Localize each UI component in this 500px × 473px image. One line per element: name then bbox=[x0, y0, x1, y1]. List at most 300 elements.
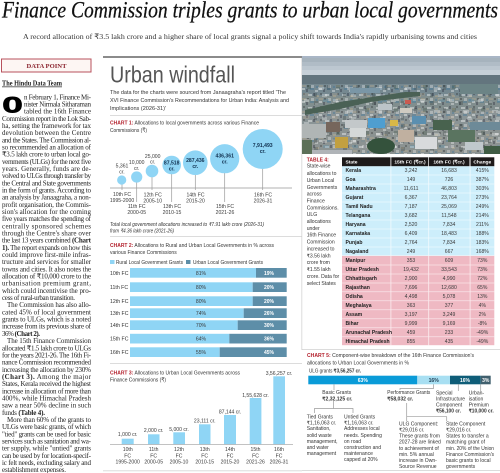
table 4 caption: Urban Local bbox=[307, 178, 334, 184]
table text: 211% bbox=[476, 222, 489, 228]
chart 2 values: 19% bbox=[264, 271, 275, 277]
table text: 25,069 bbox=[441, 204, 457, 210]
table text: Meghalaya bbox=[346, 303, 372, 309]
stacked bar bbox=[308, 376, 491, 384]
untied grants: construction and bbox=[344, 445, 381, 451]
chart 3 values bbox=[118, 371, 292, 438]
table text: 377 bbox=[445, 303, 453, 309]
photo: aerial view of city bbox=[302, 56, 500, 154]
tied grants: management, bbox=[307, 439, 338, 445]
untied grants: capped at 20% bbox=[344, 457, 378, 463]
urbanisation premium: Urban- bbox=[469, 390, 484, 396]
article text: the last 13 years combined (Chart bbox=[2, 237, 92, 245]
data point label bbox=[2, 59, 91, 72]
chart 2 bars bbox=[130, 268, 287, 357]
chart 2 values: 64% bbox=[196, 336, 207, 342]
table text: Manipur bbox=[346, 258, 365, 264]
chart 1 note: Total local government allocations increased to ₹7.91 lakh crore (2026-31) bbox=[110, 222, 264, 228]
basic grants bbox=[322, 390, 353, 402]
chart 5 heading: CHART 5: Component-wise breakdown of the 16th Finance Commission's bbox=[307, 353, 474, 359]
stacked bar: 16% bbox=[460, 378, 471, 384]
table text: Arunachal Pradesh bbox=[346, 330, 392, 336]
timeline labels bbox=[110, 192, 273, 216]
table text: 273% bbox=[476, 195, 489, 201]
chart 3 values: 87,144 cr. bbox=[219, 410, 241, 416]
table text: 73% bbox=[477, 267, 488, 273]
chart 1 heading bbox=[110, 120, 259, 134]
special infrastructure component: Component bbox=[436, 402, 463, 408]
tied grants: ₹1,16,063 cr. bbox=[307, 420, 336, 426]
table text: 33,543 bbox=[441, 267, 457, 273]
timeline labels: 11th FC bbox=[128, 204, 146, 210]
article text: 36% (Chart 2). bbox=[2, 330, 40, 338]
chart 3 axis labels: 2005-10 bbox=[170, 460, 189, 466]
performance grants bbox=[387, 390, 431, 402]
state component: min. 20% of the Union bbox=[446, 446, 494, 452]
state component: Finance Commission's bbox=[446, 452, 494, 458]
table text: 249 bbox=[407, 249, 415, 255]
table text: 73% bbox=[477, 258, 488, 264]
bubble values: 7,91,493 bbox=[253, 143, 273, 149]
timeline labels: 2010-15 bbox=[163, 210, 182, 216]
state component bbox=[446, 422, 494, 470]
article text: 1). The report expands on how this bbox=[2, 244, 91, 252]
table text: 3,249 bbox=[443, 312, 456, 318]
ULG component: min. 5% annual bbox=[399, 452, 434, 458]
table text: 13% bbox=[477, 294, 488, 300]
subtitle: A record allocation of ₹3.5 lakh crore and a higher share of local grants signal a policy shift towards India's rapidly urbanising towns and cities bbox=[23, 32, 477, 41]
table 4 caption: TABLE 4: bbox=[307, 157, 329, 163]
table text: 2% bbox=[479, 312, 486, 318]
table text: 2,900 bbox=[405, 276, 418, 282]
tied grants: solid waste bbox=[307, 433, 332, 439]
bubble values: cr. bbox=[169, 166, 175, 172]
article text bbox=[2, 93, 92, 473]
chart 2 values: 81% bbox=[196, 271, 207, 277]
urbanisation premium bbox=[469, 390, 494, 414]
table text: -49% bbox=[476, 339, 489, 345]
chart 2 heading: various Finance Commissions bbox=[110, 250, 177, 256]
table text: Haryana bbox=[346, 222, 366, 228]
table text: 7,834 bbox=[443, 222, 456, 228]
table text: 249% bbox=[476, 204, 489, 210]
timeline labels: 2026-31 bbox=[254, 198, 273, 204]
table text: 11,611 bbox=[404, 186, 419, 192]
bubble values: 25,000 bbox=[145, 154, 161, 160]
timeline labels: 13th FC bbox=[163, 204, 181, 210]
ULG component: ₹29,016 cr. bbox=[399, 428, 424, 434]
panel: table 4 bbox=[307, 157, 494, 345]
untied grants bbox=[344, 415, 382, 463]
table header bbox=[342, 157, 494, 166]
chart 3 heading: Finance Commissions (₹) bbox=[110, 376, 166, 384]
intro text: XVI Finance Commission's Recommendations for Urban India: Analysis and bbox=[110, 98, 289, 104]
heading: Urban windfall: Urban windfall bbox=[110, 61, 235, 87]
table text: Punjab bbox=[346, 240, 362, 246]
chart 3 axis labels bbox=[116, 447, 289, 466]
article text: towns and cities. It also notes the bbox=[2, 265, 91, 273]
chart 3 axis labels: 11th bbox=[149, 447, 159, 453]
tied grants: and water bbox=[307, 445, 329, 451]
chart 3 bars bbox=[122, 376, 285, 444]
table 4 caption: ₹3.56 lakh bbox=[307, 253, 331, 259]
table text: 3,242 bbox=[405, 168, 418, 174]
table 4 caption: Commissions. bbox=[307, 205, 339, 211]
chart 3 axis labels: FC bbox=[176, 453, 183, 459]
timeline labels: 1995-2000 bbox=[110, 198, 134, 204]
table 4 caption: increased to bbox=[307, 246, 335, 252]
article text: which could incentivise the pro- bbox=[2, 287, 92, 295]
table text: 4,990 bbox=[443, 276, 456, 282]
table text: Gujarat bbox=[346, 195, 364, 201]
table 4 caption: crore from bbox=[307, 260, 330, 266]
table text: 387% bbox=[476, 177, 489, 183]
table text: 459 bbox=[407, 330, 415, 336]
table text: 3,197 bbox=[405, 312, 418, 318]
article text: The Commission has also allo- bbox=[7, 301, 92, 309]
article text: five years matches the spending of bbox=[2, 215, 92, 223]
table text: 363 bbox=[407, 303, 415, 309]
state component: matching grant of bbox=[446, 440, 486, 446]
table text: 19,432 bbox=[403, 267, 419, 273]
article text: through the Centre's share over bbox=[2, 230, 92, 238]
bubble values: 436,361 bbox=[215, 154, 234, 160]
table 4 caption: Governments bbox=[307, 185, 338, 191]
chart 3 axis labels: 2021-26 bbox=[246, 460, 265, 466]
ULG component: 2027-28 are linked bbox=[399, 440, 441, 446]
timeline stems and baseline bbox=[110, 165, 292, 202]
basic grants: Basic Grants bbox=[322, 390, 352, 396]
chart 3 axis labels: FC bbox=[201, 453, 208, 459]
article text: volved to ULGs through transfer by bbox=[2, 172, 92, 180]
table text: Telangana bbox=[346, 213, 370, 219]
chart 3 values: 23,111 cr. bbox=[194, 418, 216, 424]
table text: Tamil Nadu bbox=[346, 204, 373, 210]
chart 3 axis labels: 14th bbox=[225, 447, 235, 453]
chart 2 heading: CHART 2: Allocations to Rural and Urban Local Governments in % across bbox=[110, 243, 274, 249]
article text: nance Commission recommended bbox=[2, 359, 92, 367]
chart 3 values: 1,000 cr. bbox=[118, 432, 137, 438]
chart 1 note bbox=[110, 222, 264, 235]
chart 3 axis labels: 12th bbox=[174, 447, 184, 453]
table text: Goa bbox=[346, 177, 356, 183]
ULG component: These grants from bbox=[399, 434, 440, 440]
article text: n February 1, Finance Mi- bbox=[24, 93, 92, 101]
article text: More than 60% of the grants to bbox=[7, 416, 92, 424]
table 4 caption: State-wise bbox=[307, 164, 331, 170]
article text: allocated ₹1.5 lakh crore to ULGs bbox=[2, 344, 91, 352]
article text: nister Nirmala Sitharaman bbox=[24, 100, 92, 108]
table text: 3,682 bbox=[405, 213, 418, 219]
special infrastructure component: Infrastructure bbox=[436, 396, 465, 402]
timeline labels: 16th FC bbox=[254, 192, 272, 198]
table text: Kerala bbox=[346, 168, 361, 174]
table text: 7,834 bbox=[443, 240, 456, 246]
table text: Rajasthan bbox=[346, 285, 370, 291]
special infrastructure component bbox=[436, 390, 465, 414]
table text: 667 bbox=[445, 249, 453, 255]
table 4 caption: allocations to bbox=[307, 171, 337, 177]
chart 3 axis labels: 10th bbox=[123, 447, 133, 453]
table text: Bihar bbox=[346, 321, 359, 327]
article text: so recommended an allocation of bbox=[2, 144, 92, 152]
chart 2 row labels: 14th FC bbox=[110, 323, 129, 329]
chart 3 axis labels: 2000-05 bbox=[144, 460, 163, 466]
bubble values: 5,361 bbox=[116, 164, 129, 170]
bubble values: 287,436 bbox=[186, 158, 205, 164]
table header: Change bbox=[473, 160, 492, 166]
timeline labels: 10th FC bbox=[113, 192, 131, 198]
bubble values: cr. bbox=[150, 160, 155, 166]
panel: data point article bbox=[2, 59, 92, 473]
table text: 7,696 bbox=[405, 285, 418, 291]
urbanisation premium: isation bbox=[469, 396, 483, 402]
table 4 caption: select States bbox=[307, 281, 336, 287]
chart 2 row labels: 13th FC bbox=[110, 311, 129, 317]
intro text: Implications (2026-31)' bbox=[110, 106, 166, 112]
table text: 9,169 bbox=[443, 321, 456, 327]
table text: 11,548 bbox=[441, 213, 457, 219]
chart 2 values: 26% bbox=[264, 311, 275, 317]
article text: funds (Table 4). bbox=[2, 409, 45, 417]
article text: saw a near 50% decline in such bbox=[2, 402, 92, 410]
table 4 caption: across bbox=[307, 192, 322, 198]
chart 1 heading: CHART 1: Allocations to local governments across various Finance bbox=[110, 120, 259, 126]
stacked bar: 3% bbox=[482, 378, 490, 384]
table 4 caption: Finance bbox=[307, 198, 325, 204]
bubble values: cr. bbox=[192, 164, 199, 170]
table text: 855 bbox=[407, 339, 415, 345]
chart 1 note: from ₹4.36 lakh crore (2021-26) bbox=[110, 229, 174, 235]
table header: State bbox=[346, 160, 358, 166]
article text: services such as sanitation and wa- bbox=[2, 438, 92, 446]
urbanisation premium: Premium bbox=[469, 402, 489, 408]
article text: and the States. The Commission al- bbox=[2, 136, 92, 144]
chart 2 values: 45% bbox=[264, 350, 275, 356]
table 4 caption bbox=[307, 157, 340, 287]
article text: grants to ULGs, which is a noted bbox=[2, 316, 92, 324]
table text: Assam bbox=[346, 312, 363, 318]
chart 2 values: 20% bbox=[264, 285, 275, 291]
table text: 6,367 bbox=[405, 195, 418, 201]
chart 2 legend bbox=[110, 260, 263, 266]
table text: 2,520 bbox=[405, 222, 418, 228]
table text: 4% bbox=[479, 303, 486, 309]
article text: centrally sponsored schemes bbox=[2, 222, 91, 230]
tied grants: Tied Grants bbox=[307, 415, 333, 421]
ULG component: to achievement of bbox=[399, 446, 439, 452]
urbanisation premium: ₹10,000 cr. bbox=[469, 408, 494, 414]
timeline labels: 14th FC bbox=[186, 192, 205, 198]
table text: 353 bbox=[407, 258, 415, 264]
table text: Nagaland bbox=[346, 249, 368, 255]
stacked bar: 63% bbox=[358, 378, 368, 384]
article text: increase from its previous share of bbox=[2, 323, 92, 331]
connector lines bbox=[314, 384, 481, 421]
table text: Himachal Pradesh bbox=[346, 339, 390, 345]
article text: increase in allocation of more than bbox=[2, 387, 92, 395]
chart 3 axis labels: FC bbox=[227, 453, 234, 459]
chart 2 row labels: 16th FC bbox=[110, 350, 129, 356]
timeline labels: 2005-10 bbox=[143, 198, 162, 204]
table text: 46,803 bbox=[441, 186, 457, 192]
table text: -49% bbox=[476, 330, 489, 336]
article text: an analysis by Janaagraha, a non- bbox=[2, 194, 92, 202]
article text: allocation of ₹10,000 crore to the bbox=[2, 273, 91, 281]
chart 2 row labels: 12th FC bbox=[110, 299, 129, 305]
ULG component: increase in Own- bbox=[399, 458, 437, 464]
bubble values: cr. bbox=[119, 170, 125, 176]
table text: 9,999 bbox=[405, 321, 418, 327]
chart 2 legend: Rural Local Government Grants bbox=[116, 260, 183, 266]
article text: devolution between the Centre bbox=[2, 129, 91, 137]
table text: -8% bbox=[478, 321, 487, 327]
performance grants: ₹58,032 cr. bbox=[387, 396, 414, 402]
table text: 7,187 bbox=[405, 204, 418, 210]
chart 3 axis labels: FC bbox=[276, 453, 283, 459]
chart 2 heading bbox=[110, 243, 274, 256]
article text: could improve first-mile infras- bbox=[2, 251, 92, 259]
chart 2 values: 30% bbox=[264, 323, 275, 329]
article text: The 15th Finance Commission bbox=[7, 337, 92, 345]
table text: 233 bbox=[445, 330, 453, 336]
chart 2 row labels bbox=[110, 271, 129, 356]
performance grants: Performance Grants bbox=[387, 390, 431, 396]
bubble values: 87,518 bbox=[164, 160, 180, 166]
tied grants bbox=[307, 415, 338, 457]
chart 3 axis labels: 16th bbox=[274, 447, 284, 453]
table 4 caption: allocations bbox=[307, 219, 331, 225]
table 4 caption: Commission bbox=[307, 240, 335, 246]
table text: Maharashtra bbox=[346, 186, 376, 192]
table text: Chhattisgarh bbox=[346, 276, 377, 282]
chart 2 row labels: 11th FC bbox=[110, 285, 128, 291]
article text: cated 45% of local government bbox=[2, 308, 91, 316]
basic grants: ₹2,32,125 cr. bbox=[322, 396, 353, 402]
bubble values: cr. bbox=[260, 149, 266, 155]
article text: ha, setting the framework for tax bbox=[2, 122, 92, 130]
timeline labels: 2000-05 bbox=[127, 210, 146, 216]
article text: in the form of grants. According to bbox=[2, 186, 92, 194]
byline: The Hindu Data Team bbox=[2, 80, 62, 88]
table header: 15th FC (₹cr.) bbox=[394, 160, 426, 166]
total label: ULG grants ₹3,56,257 cr. bbox=[309, 369, 361, 375]
bubble values: cr. bbox=[222, 160, 228, 166]
chart 2 values: 80% bbox=[196, 299, 207, 305]
panel: chart 5 component breakdown bbox=[307, 353, 494, 470]
article text: can be used by for location-specif- bbox=[2, 452, 92, 460]
chart 3 values: 5,000 cr. bbox=[169, 427, 189, 433]
table text: 303% bbox=[476, 186, 489, 192]
ULG component: Source Revenue bbox=[399, 464, 437, 470]
chart 3 axis labels: 2015-20 bbox=[221, 460, 240, 466]
article text: ic felt needs, excluding salary and bbox=[2, 459, 92, 467]
untied grants: maintenance bbox=[344, 451, 373, 457]
chart 2 values: 70% bbox=[196, 323, 207, 329]
table text: 168% bbox=[476, 249, 489, 255]
table 4 caption: ULG bbox=[307, 212, 317, 218]
article text: cess of rural-urban transition. bbox=[2, 294, 75, 302]
state component: ₹29,016 cr. bbox=[446, 428, 471, 434]
chart 3 axis labels: 13th bbox=[200, 447, 210, 453]
table text: 5,078 bbox=[443, 294, 456, 300]
tied grants: Sanitation, bbox=[307, 426, 331, 432]
chart 3 heading bbox=[110, 370, 240, 384]
chart 3 values: 2,000 cr. bbox=[144, 428, 163, 434]
chart 2 row labels: 15th FC bbox=[110, 336, 129, 342]
bubble values bbox=[116, 143, 273, 176]
timeline labels: 2021-26 bbox=[216, 210, 235, 216]
table rows bbox=[342, 166, 494, 345]
table text: 214% bbox=[476, 213, 489, 219]
article text: Commission report in the Lok Sab- bbox=[2, 115, 92, 123]
chart 3 axis labels: FC bbox=[252, 453, 259, 459]
bubble values: cr. bbox=[134, 166, 139, 172]
table 4 caption: crore. Data for bbox=[307, 274, 340, 280]
chart 3 axis labels: 2026-31 bbox=[270, 460, 289, 466]
ULG component bbox=[399, 422, 441, 470]
table text: 12,680 bbox=[441, 285, 457, 291]
stacked bar: 16% bbox=[429, 378, 439, 384]
chart 3 axis labels: 1995-2000 bbox=[116, 460, 140, 466]
article text: years. Generally, funds are de- bbox=[2, 165, 92, 173]
chart 2 legend: Urban Local Government Grants bbox=[193, 260, 263, 266]
table text: 23,764 bbox=[441, 195, 457, 201]
table text: 65% bbox=[477, 285, 488, 291]
intro text bbox=[110, 90, 289, 112]
table text: 188% bbox=[476, 231, 489, 237]
article text: increasing the allocation by 230% bbox=[2, 366, 91, 374]
chart 5 heading bbox=[307, 353, 474, 366]
article text: tructure and services for smaller bbox=[2, 258, 92, 266]
chart 2 row labels: 10th FC bbox=[110, 271, 129, 277]
table 4 caption: 16th Finance bbox=[307, 233, 336, 239]
article text: urbanisation premium grant, bbox=[2, 280, 91, 288]
chart 2 values: 80% bbox=[196, 285, 207, 291]
table text: 149 bbox=[407, 177, 415, 183]
article text: "tied" grants can be used for basic bbox=[2, 430, 91, 438]
table text: 72% bbox=[477, 276, 488, 282]
bubbles bbox=[117, 129, 283, 185]
data point label: DATA POINT bbox=[26, 63, 67, 70]
bubble values: 10,000 bbox=[129, 160, 145, 166]
article text: sion's allocation for the coming bbox=[2, 208, 92, 216]
chart 3 axis labels: FC bbox=[150, 453, 157, 459]
table header: 16th FC (₹cr.) bbox=[433, 160, 465, 166]
table 4 caption: ₹1.55 lakh bbox=[307, 267, 331, 273]
untied grants: Addresses local bbox=[344, 426, 380, 432]
table text: 726 bbox=[445, 177, 453, 183]
article text: ₹3.5 lakh crore to urban local go- bbox=[2, 151, 92, 159]
article text: tabled the 16th Finance bbox=[24, 108, 91, 116]
tied grants: management bbox=[307, 451, 337, 457]
panel: chart 2 stacked bars bbox=[110, 243, 287, 357]
panel: chart 1 bubble timeline bbox=[110, 120, 292, 235]
timeline labels: 12th FC bbox=[144, 192, 162, 198]
table text: 18,483 bbox=[441, 231, 457, 237]
table text bbox=[346, 168, 489, 345]
chart 2 values: 20% bbox=[264, 299, 275, 305]
chart 3 heading: CHART 3: Allocations to Urban Local Governments across bbox=[110, 370, 240, 376]
timeline labels: 15th FC bbox=[216, 204, 234, 210]
table text: 435 bbox=[445, 339, 453, 345]
chart 3 values: 3,56,257 cr. bbox=[266, 371, 292, 377]
article text: vernments (ULGs) for the next five bbox=[2, 158, 91, 166]
table text: 6,409 bbox=[405, 231, 418, 237]
untied grants: ₹1,16,063 cr. bbox=[344, 420, 374, 426]
table 4 caption: under bbox=[307, 226, 320, 232]
article text: (Chart 3). Among the major bbox=[2, 373, 92, 381]
